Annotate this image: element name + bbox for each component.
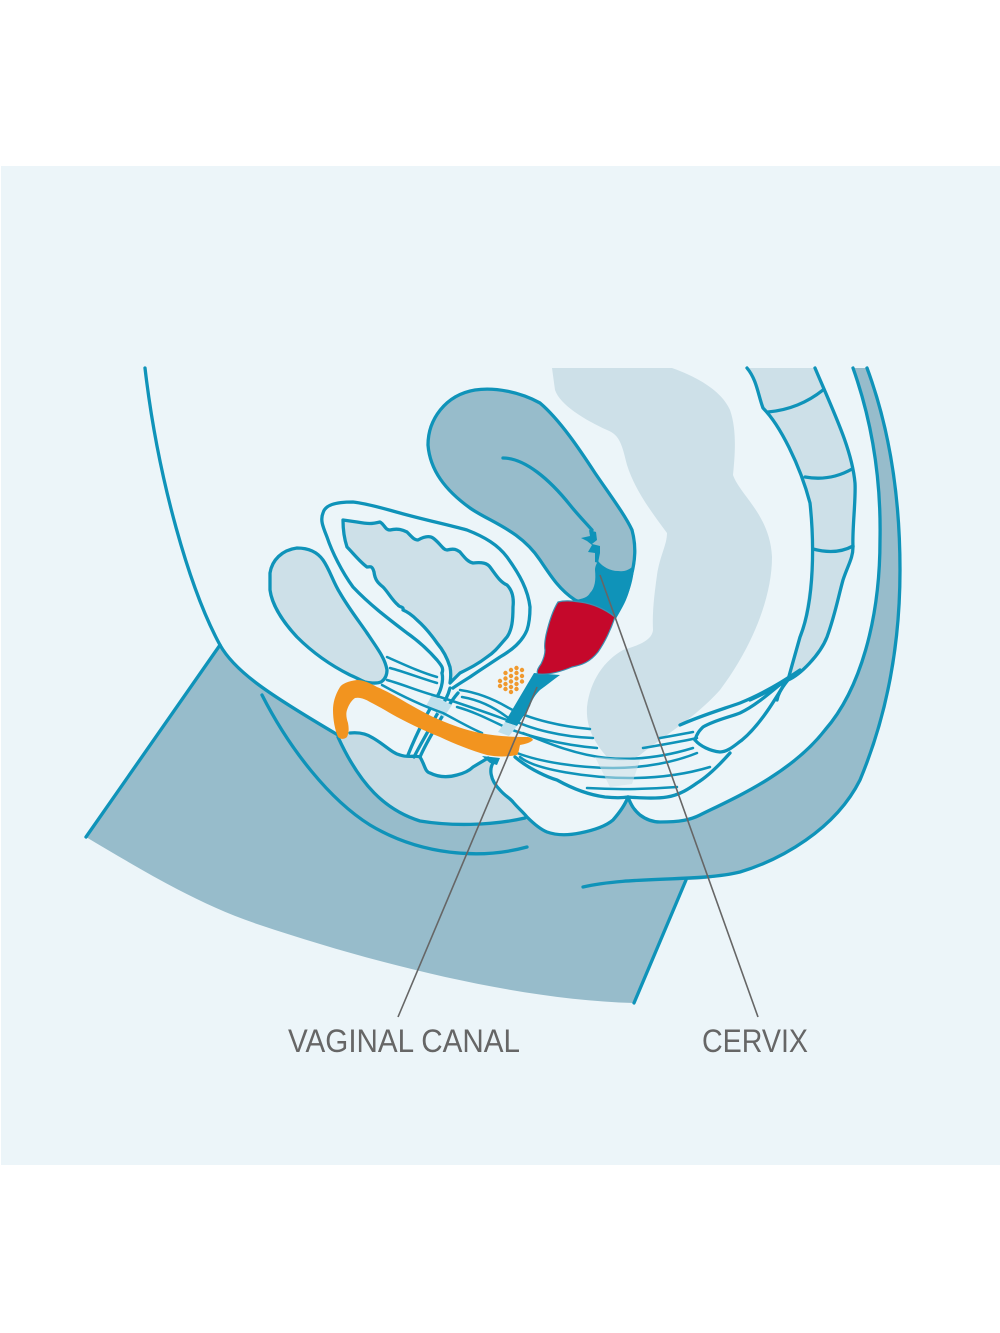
bladder <box>322 502 530 688</box>
pointer line: cervix <box>600 575 758 1017</box>
colon <box>747 368 855 700</box>
background panel <box>1 166 1000 1165</box>
orange dots <box>498 666 524 694</box>
urethra <box>408 673 458 757</box>
uterus <box>428 389 635 618</box>
body silhouette <box>86 368 900 1003</box>
label: vaginal canal: VAGINAL CANAL <box>288 1023 520 1059</box>
cervix canal folds <box>581 530 600 563</box>
rectum <box>552 368 772 761</box>
labia and lower tissue <box>262 695 628 854</box>
pointer line: vaginal canal <box>398 687 537 1017</box>
pubic bone <box>270 548 387 683</box>
cervix tissue <box>575 561 634 618</box>
vaginal canal <box>482 673 560 765</box>
orange clitoris and urethra structure <box>333 680 533 756</box>
menstrual cup <box>537 601 615 674</box>
label: cervix: CERVIX <box>702 1023 808 1059</box>
pelvic floor muscle fibres <box>382 657 800 798</box>
uterine lining <box>503 458 592 530</box>
